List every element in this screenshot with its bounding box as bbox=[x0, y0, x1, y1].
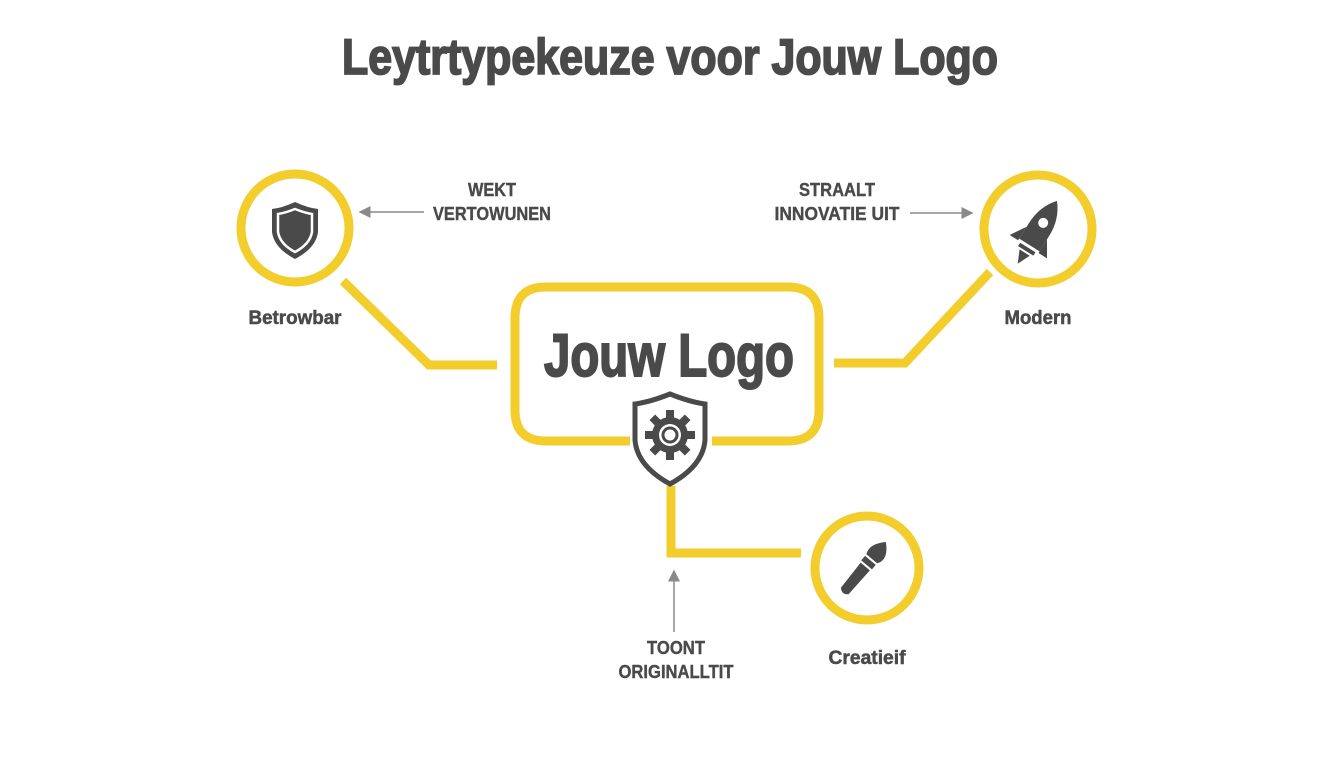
callout: wekt vertrouwen: VERTOWUNEN bbox=[433, 204, 551, 224]
node: Betrowbar: Betrowbar bbox=[248, 308, 342, 329]
callout: wekt vertrouwen bbox=[360, 180, 551, 224]
icon: gear shield bbox=[635, 394, 705, 484]
center heading: Jouw Logo bbox=[544, 322, 794, 389]
callout: toont originaliteit: ORIGINALLTIT bbox=[618, 662, 734, 682]
icon: paintbrush bbox=[837, 537, 893, 599]
callout: toont originaliteit: TOONT bbox=[647, 638, 705, 658]
title: Leytrtypekeuze voor Jouw Logo bbox=[342, 29, 998, 85]
connector: left bbox=[343, 281, 497, 365]
icon: rocket bbox=[999, 189, 1076, 275]
callout: straalt innovatie uit: STRAALT bbox=[799, 180, 875, 200]
callout: toont originaliteit bbox=[618, 571, 734, 682]
node: Modern bbox=[984, 175, 1092, 329]
node: Creatieif bbox=[815, 516, 919, 669]
icon: shield bbox=[272, 202, 318, 259]
node: Betrowbar bbox=[241, 174, 349, 329]
callout: straalt innovatie uit bbox=[774, 180, 972, 224]
node: Modern: Modern bbox=[1004, 308, 1072, 329]
center box bbox=[515, 287, 819, 484]
connector: right bbox=[834, 272, 990, 363]
connector: bottom bbox=[671, 486, 801, 553]
callout: wekt vertrouwen: WEKT bbox=[468, 180, 516, 200]
callout: straalt innovatie uit: INNOVATIE UIT bbox=[774, 204, 900, 224]
node: Creatieif: Creatieif bbox=[828, 648, 906, 669]
